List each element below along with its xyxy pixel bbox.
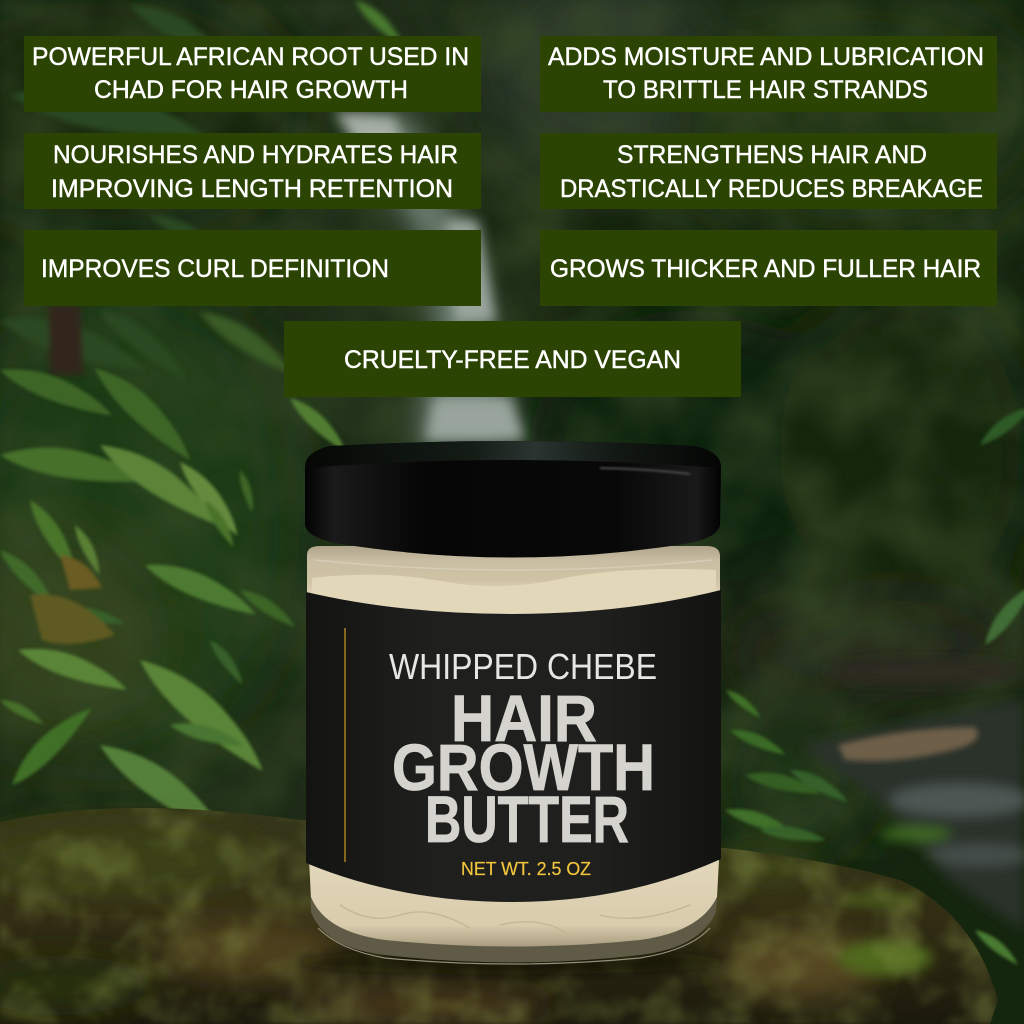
label: product name: WHIPPED CHEBE bbox=[389, 646, 657, 687]
callout: nourishes: NOURISHES AND HYDRATES HAIR bbox=[53, 141, 458, 169]
foliage leaves left bbox=[0, 359, 353, 841]
label bbox=[306, 590, 721, 902]
rock with moss bbox=[0, 808, 998, 1024]
jar shadow bbox=[290, 950, 734, 974]
callout: moisture: ADDS MOISTURE AND LUBRICATION bbox=[548, 43, 984, 71]
stream bbox=[800, 660, 1024, 930]
callout: strengthens bbox=[540, 133, 997, 209]
callout: moisture: TO BRITTLE HAIR STRANDS bbox=[603, 76, 928, 104]
callout: strengthens: STRENGTHENS HAIR AND bbox=[617, 141, 927, 169]
callout: curl definition bbox=[24, 230, 481, 306]
product jar: HAIR bbox=[451, 681, 597, 755]
whipped butter bottom layer bbox=[309, 860, 719, 946]
callout: African root bbox=[24, 36, 481, 112]
callout: nourishes: IMPROVING LENGTH RETENTION bbox=[51, 175, 453, 203]
foliage right bbox=[723, 398, 1024, 966]
product jar bbox=[290, 441, 734, 974]
callout: African root: POWERFUL AFRICAN ROOT USED IN bbox=[32, 43, 469, 71]
callout: cruelty-free bbox=[284, 321, 741, 397]
callout: nourishes bbox=[24, 133, 481, 209]
glass jar top with butter bbox=[307, 546, 720, 620]
callout: thicker hair: GROWS THICKER AND FULLER HAIR bbox=[550, 255, 981, 283]
waterfall bbox=[345, 115, 520, 445]
callout: strengthens: DRASTICALLY REDUCES BREAKAGE bbox=[560, 175, 983, 203]
product jar: GROWTH bbox=[392, 730, 655, 804]
dim far leaves bbox=[0, 0, 409, 383]
callout: curl definition: IMPROVES CURL DEFINITION bbox=[41, 255, 389, 283]
callout: moisture bbox=[540, 36, 997, 112]
callout: African root: CHAD FOR HAIR GROWTH bbox=[94, 76, 408, 104]
glass jar bottom bbox=[310, 880, 718, 962]
callout: cruelty-free: CRUELTY-FREE AND VEGAN bbox=[344, 346, 681, 374]
product jar: BUTTER bbox=[425, 782, 629, 856]
lid bbox=[305, 441, 721, 558]
callout: thicker hair bbox=[540, 230, 997, 306]
label: net weight: NET WT. 2.5 OZ bbox=[461, 859, 591, 879]
